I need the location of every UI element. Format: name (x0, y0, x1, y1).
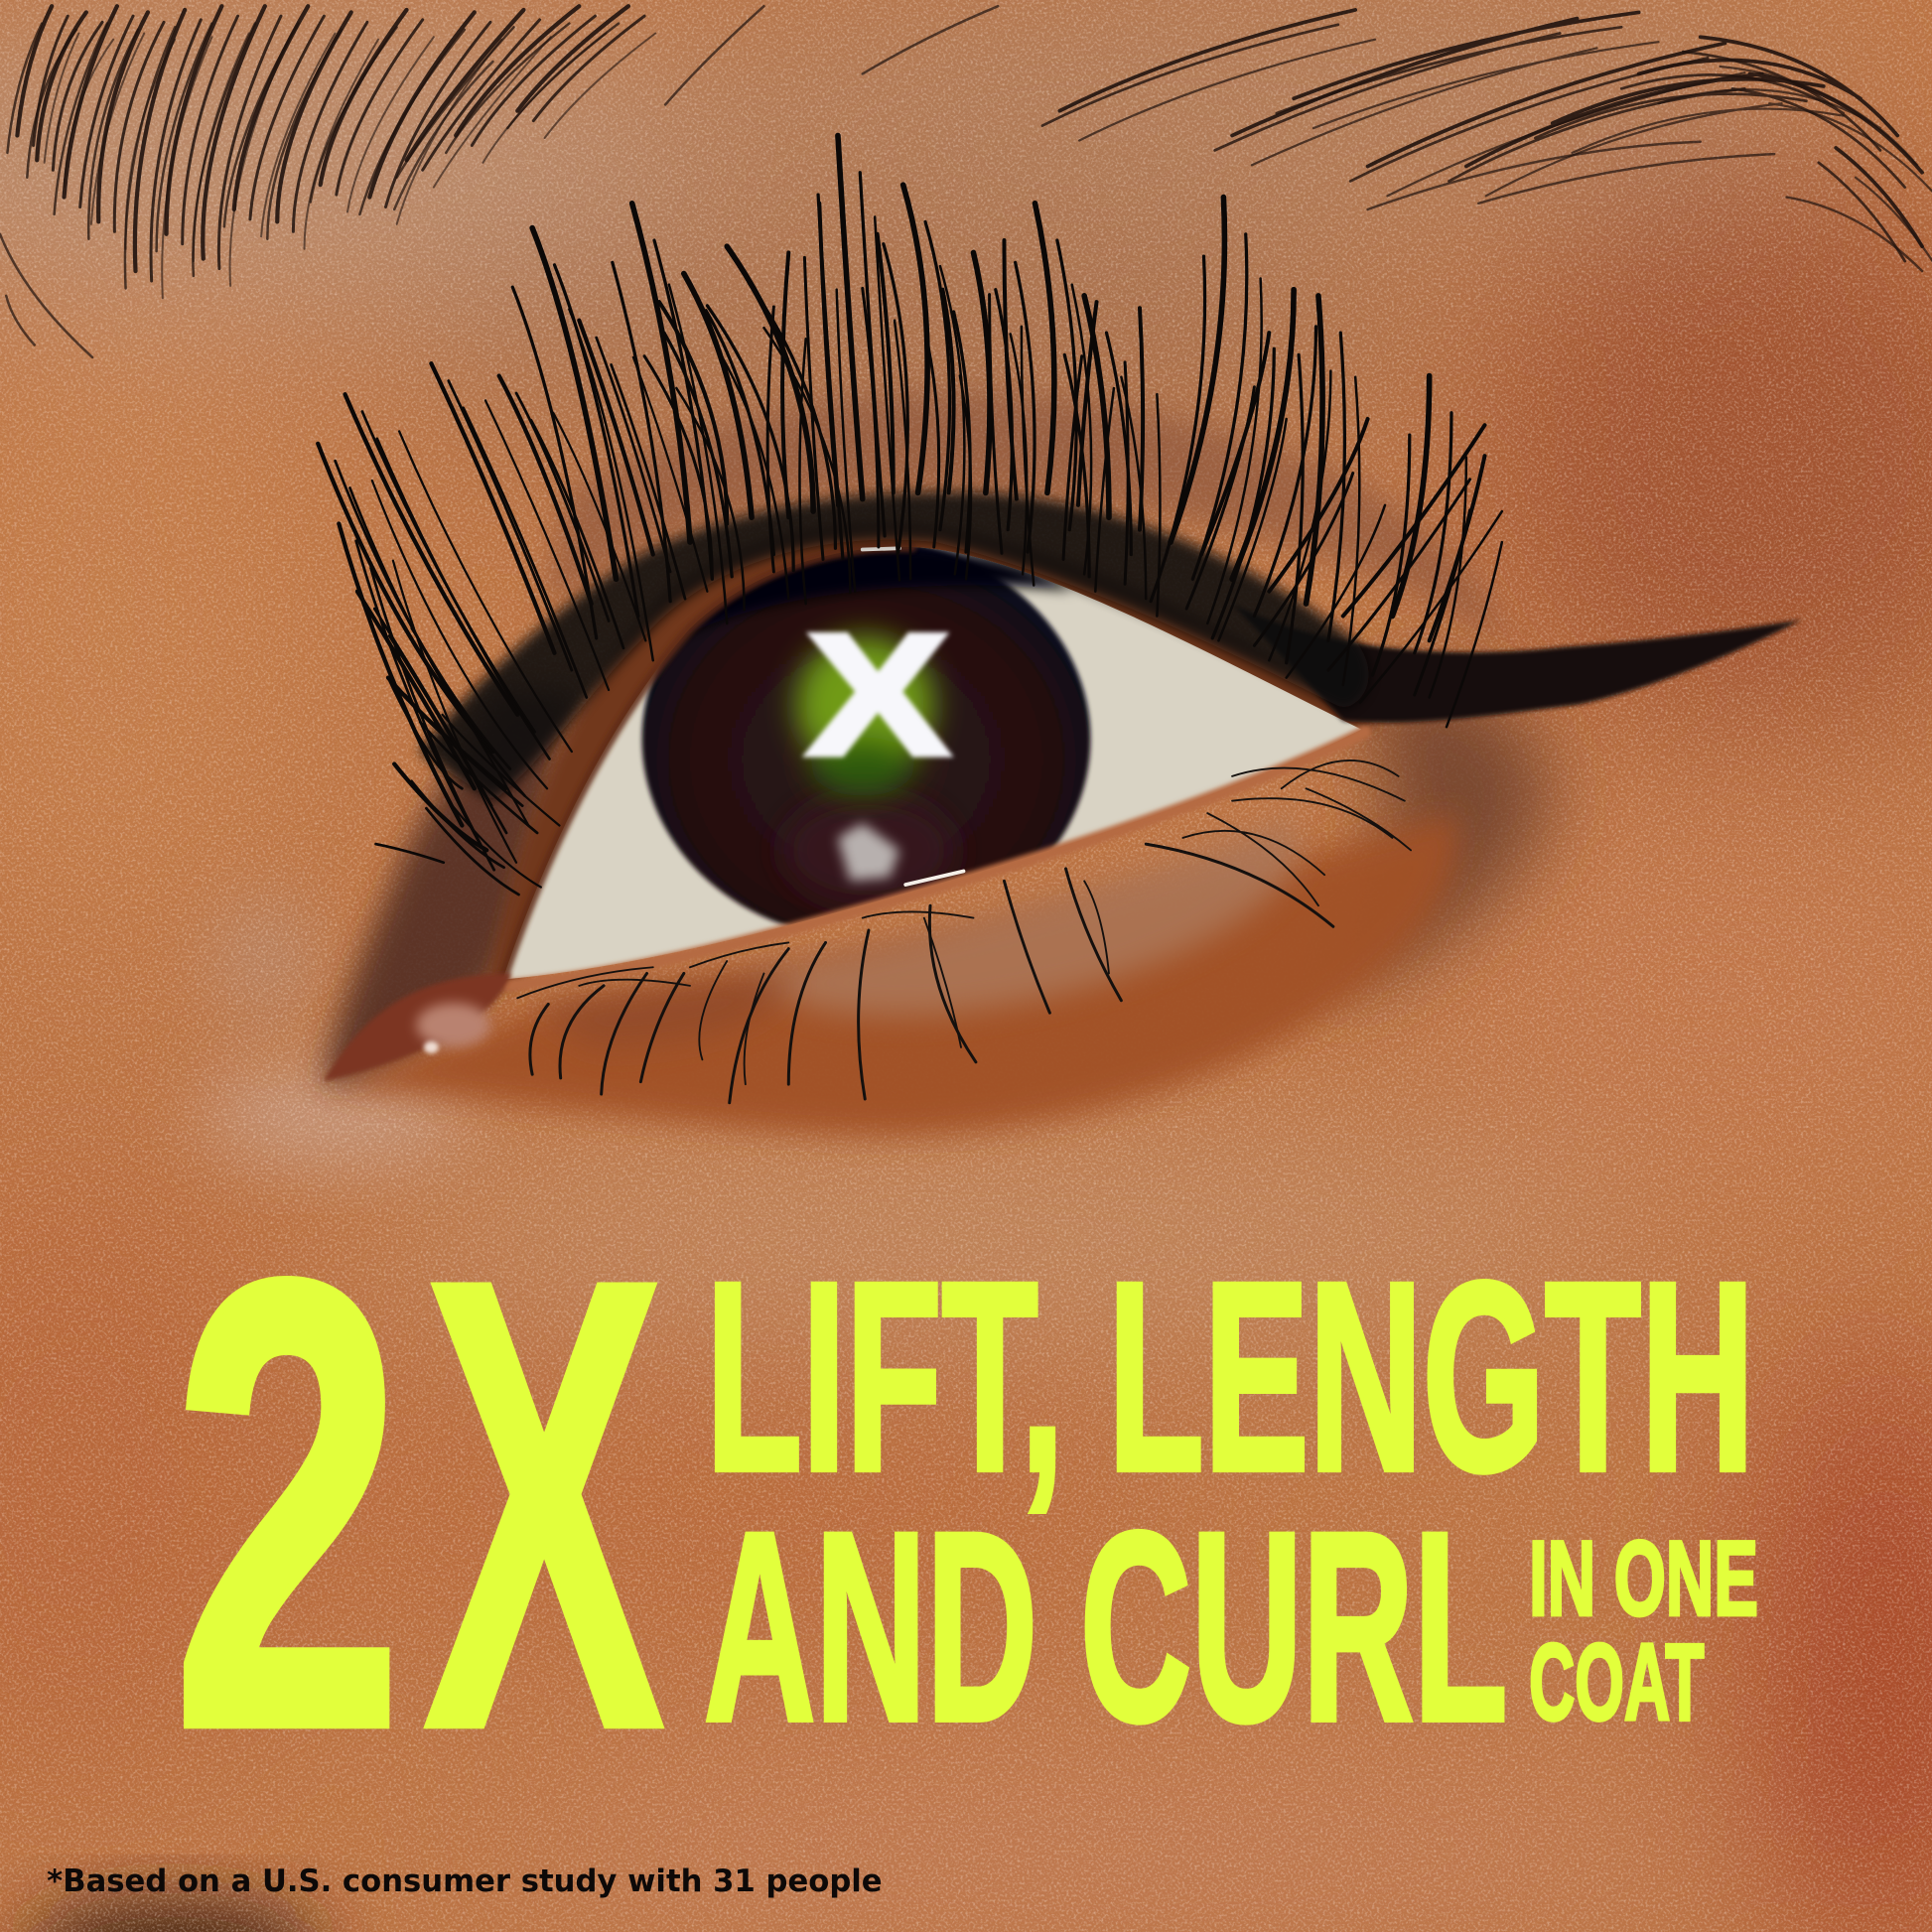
big 2X: X (425, 1150, 664, 1859)
eye white (502, 547, 1361, 980)
iris reflection (838, 823, 899, 881)
tear duct (323, 973, 511, 1082)
small text in one coat: IN ONE (1529, 1518, 1758, 1637)
upper eyelid skin (486, 522, 1380, 986)
eyebrow hairs (0, 6, 1932, 357)
eyelid rims (502, 547, 1365, 986)
logo glow (796, 635, 934, 796)
logo letter: X (807, 599, 949, 791)
headline (173, 1150, 1758, 1859)
upper lashes (318, 136, 1502, 895)
iris (642, 540, 1090, 939)
footnote: *Based on a U.S. consumer study with 31 people (47, 1863, 883, 1899)
reflected X logo (796, 599, 949, 796)
big 2X: 2 (173, 1150, 403, 1859)
small text in one coat (1529, 1518, 1758, 1743)
lower lashes (517, 760, 1411, 1103)
eyeliner wing (1232, 604, 1801, 723)
small text in one coat: COAT (1529, 1622, 1704, 1743)
eye socket shadows (323, 392, 1550, 1137)
